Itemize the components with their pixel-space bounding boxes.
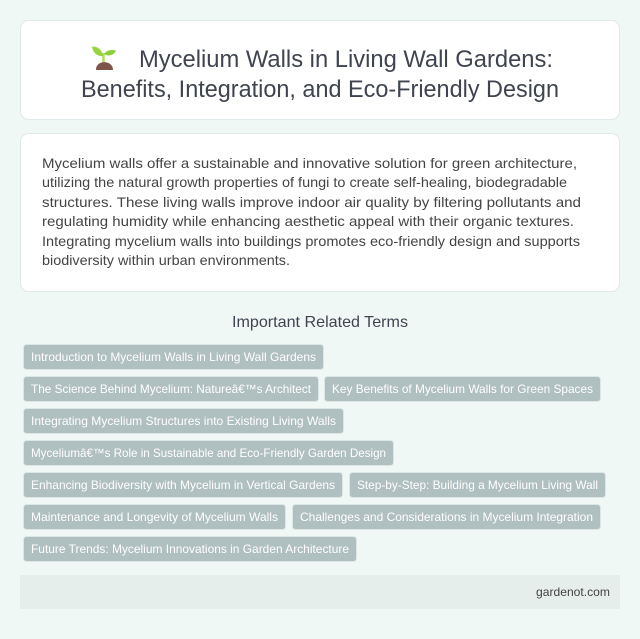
- tag: [324, 376, 600, 402]
- tag: Step-by-Step: Building a Mycelium Living Wall: [357, 478, 598, 492]
- tag: [24, 536, 356, 562]
- title: Benefits, Integration, and Eco-Friendly Design: [81, 76, 559, 103]
- text block: description: biodiversity within urban environments.: [42, 252, 290, 268]
- tag: The Science Behind Mycelium: Natureâ€™s Architect: [31, 382, 312, 396]
- text block: description: Mycelium walls offer a sustainable and innovative solution for green architecture,: [42, 155, 577, 171]
- tag: Challenges and Considerations in Mycelium Integration: [300, 510, 593, 524]
- tag: Key Benefits of Mycelium Walls for Green Spaces: [332, 382, 593, 396]
- tag: Introduction to Mycelium Walls in Living Wall Gardens: [31, 350, 316, 364]
- tag: Future Trends: Mycelium Innovations in Garden Architecture: [31, 542, 349, 556]
- tag: Enhancing Biodiversity with Mycelium in Vertical Gardens: [31, 478, 335, 492]
- tag: [24, 376, 318, 402]
- tag: [24, 504, 286, 530]
- panel: description: [20, 134, 620, 292]
- tag: [292, 504, 600, 530]
- title: Mycelium Walls in Living Wall Gardens:: [139, 46, 553, 73]
- tag: Integrating Mycelium Structures into Existing Living Walls: [31, 414, 336, 428]
- footer text: gardenot.com: [536, 585, 610, 599]
- tag: [24, 440, 394, 466]
- text block: description: [42, 155, 581, 268]
- text block: description: regulating humidity while enhancing aesthetic appeal with their organic textures.: [42, 213, 574, 229]
- tag group: related terms: [24, 344, 606, 562]
- heading: related terms: Important Related Terms: [232, 314, 408, 331]
- text block: description: utilizing the natural growth properties of fungi to create self-healing, biodegradable: [42, 174, 567, 190]
- footer: [20, 575, 620, 609]
- panel: title card: [20, 20, 620, 120]
- tag: [24, 344, 324, 370]
- tag: Myceliumâ€™s Role in Sustainable and Eco-Friendly Garden Design: [31, 446, 386, 460]
- tag: [24, 472, 342, 498]
- text block: description: Integrating mycelium walls into buildings promotes eco-friendly design and supports: [42, 233, 580, 249]
- tag: Maintenance and Longevity of Mycelium Walls: [31, 510, 278, 524]
- title: [81, 46, 559, 103]
- text block: description: structures. These living walls improve indoor air quality by filtering pollutants and: [42, 194, 581, 210]
- icon: seedling: [92, 46, 116, 70]
- tag: [350, 472, 606, 498]
- tag: [24, 408, 344, 434]
